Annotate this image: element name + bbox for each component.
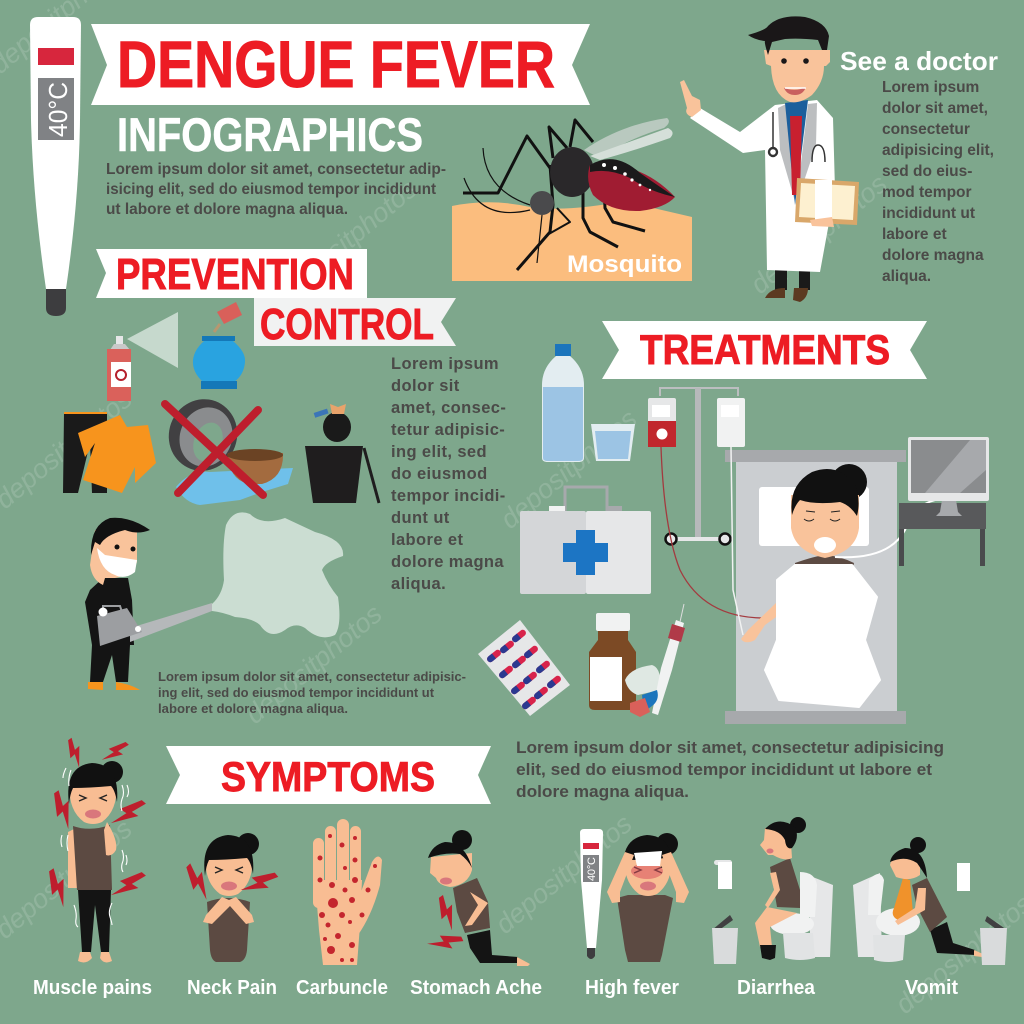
control text column: dolor sit bbox=[391, 377, 460, 395]
icon: spray can bbox=[107, 312, 178, 401]
icon: pill blister bbox=[478, 620, 570, 716]
subtitle: INFOGRAPHICS bbox=[117, 108, 423, 161]
control text column: ing elit, sed bbox=[391, 443, 487, 461]
symptom labels bbox=[33, 977, 958, 999]
doctor text: dolore magna bbox=[882, 247, 984, 264]
symptom labels: Carbuncle bbox=[296, 977, 388, 999]
symptom labels: High fever bbox=[585, 977, 679, 999]
illustration: man fogging bbox=[85, 512, 343, 690]
doctor text: consectetur bbox=[882, 121, 970, 138]
doctor text: adipisicing elit, bbox=[882, 142, 994, 159]
symptoms text bbox=[516, 739, 944, 801]
icon: large thermometer bbox=[30, 17, 81, 316]
symptoms ribbon: SYMPTOMS bbox=[221, 753, 435, 800]
symptoms text: dolore magna aliqua. bbox=[516, 783, 689, 801]
symptoms text: Lorem ipsum dolor sit amet, consectetur adipisicing bbox=[516, 739, 944, 757]
symptom: stomach ache bbox=[426, 830, 530, 966]
doctor text: Lorem ipsum bbox=[882, 79, 979, 96]
icon: hanging clothes bbox=[63, 412, 156, 493]
fogging text: Lorem ipsum dolor sit amet, consectetur adipisic- bbox=[158, 670, 466, 684]
symptom: neck pain bbox=[179, 833, 280, 962]
control text column: labore et bbox=[391, 531, 463, 549]
doctor text: mod tempor bbox=[882, 184, 972, 201]
watermarks: depositphotos bbox=[275, 174, 423, 305]
symptom: diarrhea bbox=[712, 817, 833, 964]
icon: tire, bowl, puddle crossed out bbox=[159, 390, 293, 505]
symptom: high fever bbox=[580, 829, 689, 962]
illustration: doctor bbox=[680, 16, 859, 302]
icon: trash bin with bag bbox=[305, 404, 379, 503]
watermarks: depositphotos bbox=[495, 404, 643, 535]
control text column: do eiusmod bbox=[391, 465, 488, 483]
icon: large thermometer: 40°C bbox=[43, 82, 73, 137]
fogging text: ing elit, sed do eiusmod tempor incididunt ut bbox=[158, 686, 435, 700]
control text column: dunt ut bbox=[391, 509, 450, 527]
icon: first aid kit bbox=[520, 487, 651, 594]
intro text bbox=[106, 161, 446, 218]
doctor text: sed do eius- bbox=[882, 163, 972, 180]
control text column: tempor incidi- bbox=[391, 487, 506, 505]
control text column bbox=[391, 355, 506, 593]
control text column: amet, consec- bbox=[391, 399, 506, 417]
symptom labels: Stomach Ache bbox=[410, 977, 542, 999]
control text column: tetur adipisic- bbox=[391, 421, 505, 439]
prevention ribbon: PREVENTION bbox=[116, 250, 354, 299]
control text column: dolore magna bbox=[391, 553, 504, 571]
symptom: vomit bbox=[853, 837, 1007, 965]
fogging text: labore et dolore magna aliqua. bbox=[158, 702, 348, 716]
symptom labels: Diarrhea bbox=[737, 977, 816, 999]
control text column: aliqua. bbox=[391, 575, 446, 593]
watermarks: depositphotos bbox=[745, 169, 893, 300]
icon: IV stand and bags bbox=[648, 388, 745, 544]
symptoms ribbon bbox=[166, 746, 491, 804]
icon: monitor and table bbox=[899, 437, 989, 566]
doctor text bbox=[882, 79, 994, 285]
symptom: carbuncle hand bbox=[313, 819, 382, 965]
doctor text: aliqua. bbox=[882, 268, 931, 285]
icon: medicine bottle bbox=[589, 613, 636, 710]
illustration: mosquito on skin bbox=[452, 118, 692, 281]
icon: bandage, syringe and capsules bbox=[625, 604, 685, 717]
symptom: muscle pains bbox=[40, 737, 148, 962]
symptom labels: Muscle pains bbox=[33, 977, 152, 999]
symptoms text: elit, sed do eiusmod tempor incididunt ut labore et bbox=[516, 761, 933, 779]
icon: water jar with packet bbox=[193, 302, 245, 389]
doctor text: incididunt ut bbox=[882, 205, 975, 222]
fogging text bbox=[158, 670, 466, 716]
symptom labels: Neck Pain bbox=[187, 977, 277, 999]
intro text: Lorem ipsum dolor sit amet, consectetur adip- bbox=[106, 161, 446, 178]
doctor text: dolor sit amet, bbox=[882, 100, 988, 117]
intro text: ut labore et dolore magna aliqua. bbox=[106, 201, 348, 218]
doctor text: labore et bbox=[882, 226, 947, 243]
watermarks: depositphotos bbox=[240, 599, 388, 730]
control text column: Lorem ipsum bbox=[391, 355, 499, 373]
control ribbon: CONTROL bbox=[260, 300, 434, 349]
treatments ribbon: TREATMENTS bbox=[640, 326, 890, 373]
title ribbon: DENGUE FEVER bbox=[117, 27, 555, 101]
watermarks: depositphotos bbox=[745, 599, 893, 730]
illustration: mosquito on skin: Mosquito bbox=[567, 251, 682, 278]
see a doctor heading: See a doctor bbox=[840, 46, 998, 76]
symptom: high fever: 40°C bbox=[586, 857, 598, 881]
intro text: isicing elit, sed do eiusmod tempor incididunt bbox=[106, 181, 436, 198]
symptom labels: Vomit bbox=[905, 977, 958, 999]
illustration: patient in bed bbox=[661, 447, 935, 724]
icon: water bottle and glass bbox=[542, 344, 635, 462]
watermarks: depositphotos bbox=[490, 809, 638, 940]
